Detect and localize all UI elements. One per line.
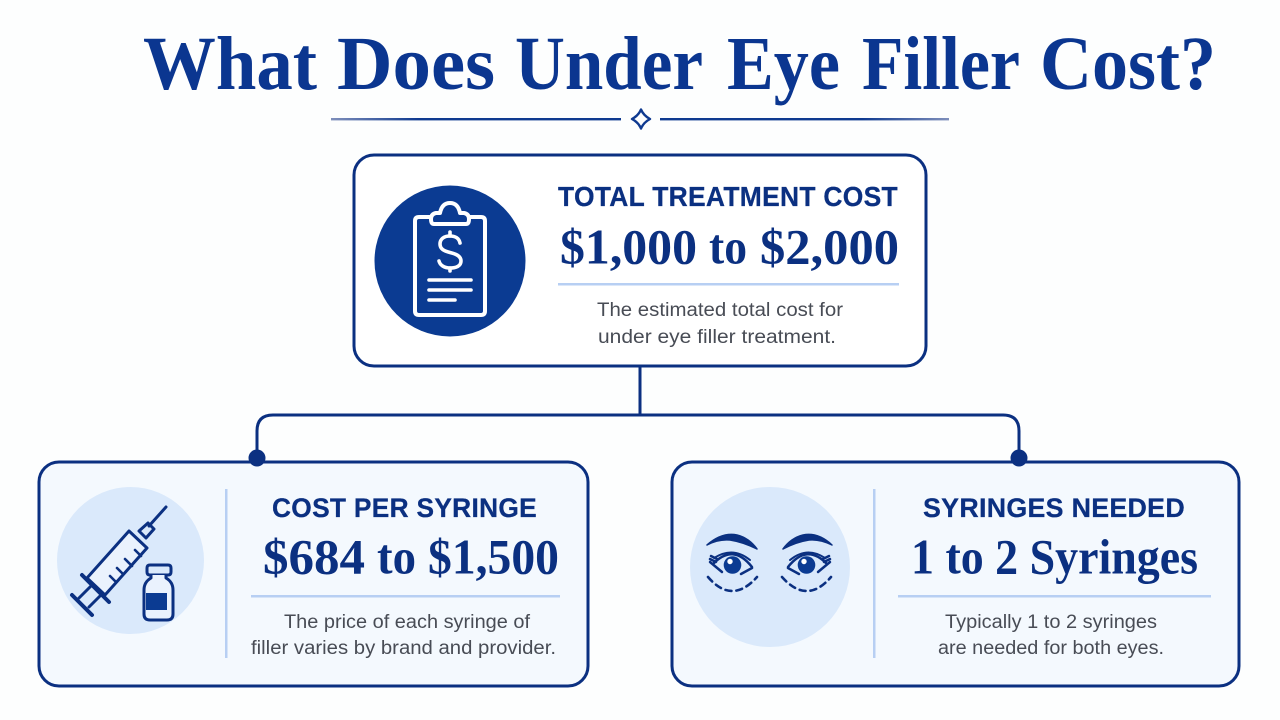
connector dot [1010,450,1028,466]
title divider with diamond [331,110,949,128]
divider [251,595,560,598]
title: What [143,22,317,106]
description: Typically 1 to 2 syringes [945,612,1157,633]
title: Eye [727,22,840,106]
right eye [782,534,832,591]
value: $1,500 [428,528,559,584]
description: under eye filler treatment. [598,327,836,348]
value [263,528,559,584]
left eye [707,534,757,591]
description [938,612,1164,659]
divider [898,595,1211,598]
title: Cost? [1040,22,1216,106]
title [143,22,1216,106]
vertical divider [225,489,228,658]
value: to [709,218,747,274]
description [597,300,844,348]
title: Does [337,22,495,106]
value: $2,000 [760,218,899,274]
divider [558,283,899,286]
title: Filler [862,22,1020,106]
title: Under [515,22,703,106]
description: filler varies by brand and provider. [251,638,556,659]
vertical divider [873,489,876,658]
heading: COST PER SYRINGE [272,493,537,523]
value: $684 [263,528,365,584]
connector lines [257,366,1019,458]
heading: TOTAL TREATMENT COST [558,181,898,212]
heading: SYRINGES NEEDED [923,493,1185,523]
description [251,612,556,659]
panel: cost per syringe [39,450,588,686]
value: 1 to 2 Syringes [911,528,1198,584]
panel: total treatment cost [354,155,926,366]
icon: syringe and vial [57,487,204,634]
value: $1,000 [560,218,697,274]
connector dot [248,450,266,466]
icon: eyes [690,487,850,647]
value: to [377,528,416,584]
icon: clipboard with dollar sign [374,186,526,336]
value [560,218,899,274]
description: are needed for both eyes. [938,638,1164,659]
description: The price of each syringe of [284,612,531,633]
panel: syringes needed [672,450,1239,686]
description: The estimated total cost for [597,300,844,321]
